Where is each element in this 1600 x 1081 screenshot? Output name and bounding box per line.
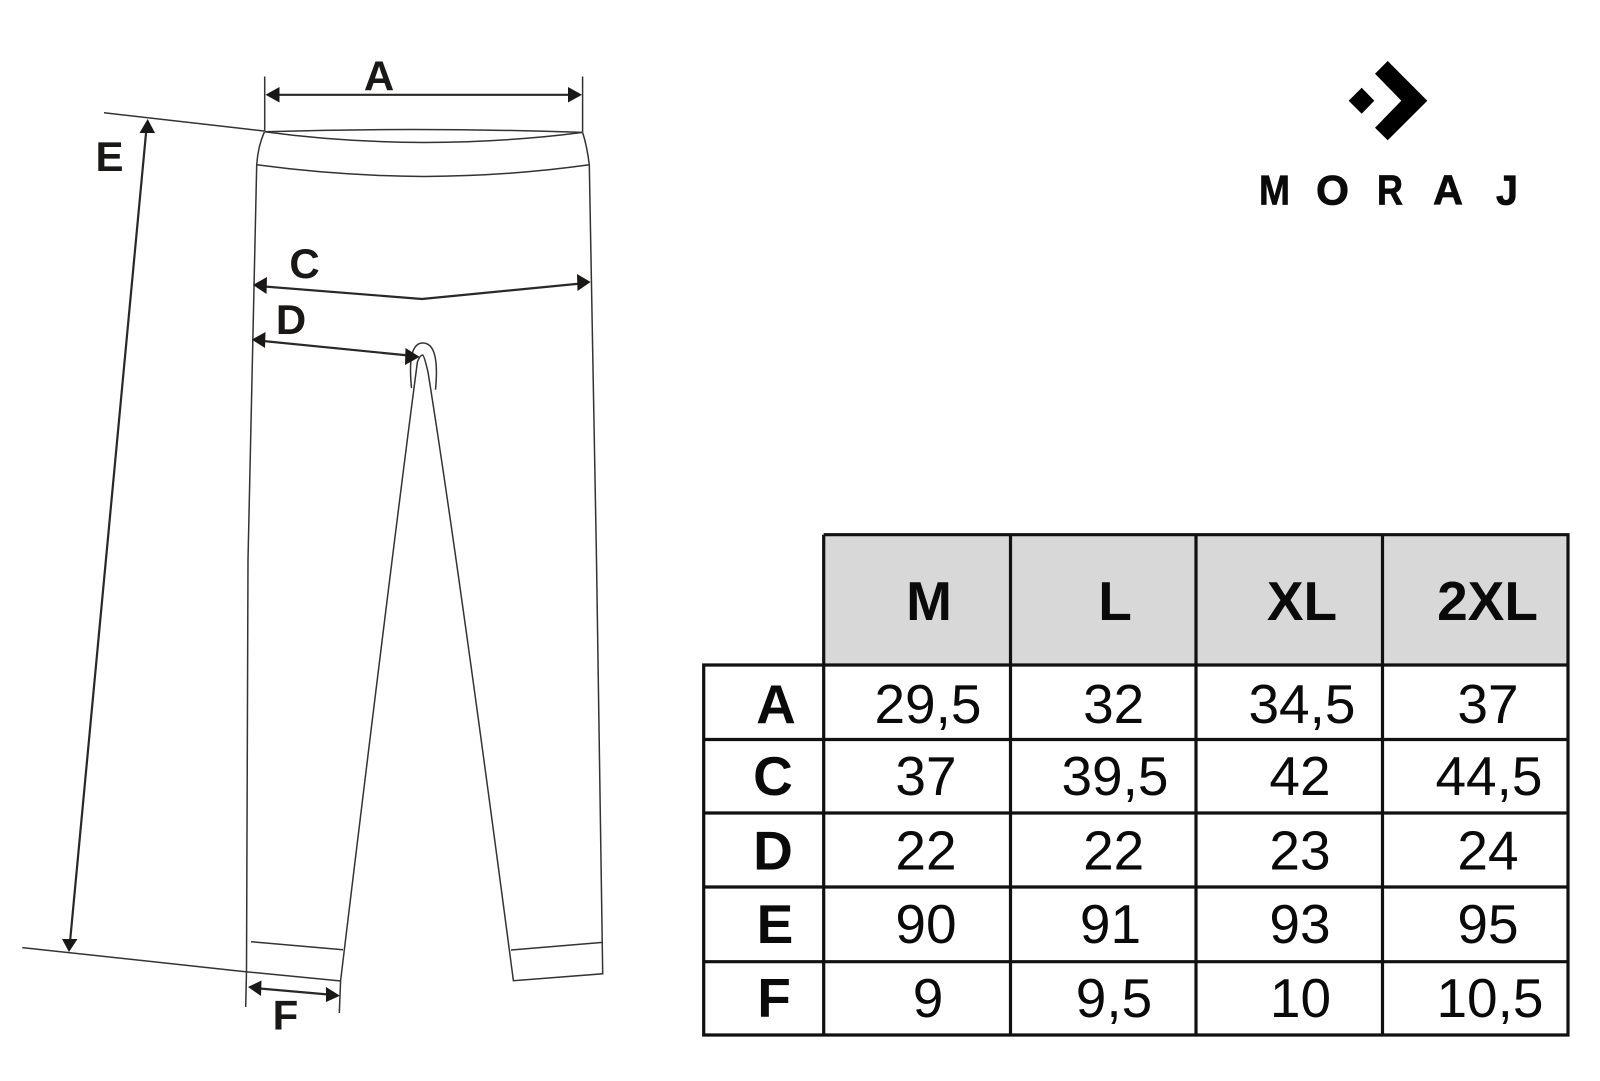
wordmark: A — [1433, 166, 1463, 214]
row F: 10 — [1270, 967, 1331, 1029]
dimension D: thigh width: D — [276, 296, 306, 343]
row F: 9 — [913, 967, 943, 1029]
dimension F: hem width — [246, 971, 341, 1038]
row D: 22 — [1083, 820, 1144, 882]
leggings diagram — [22, 52, 603, 1038]
wordmark — [1259, 166, 1518, 214]
row A: 29,5 — [874, 673, 982, 735]
wordmark: J — [1496, 166, 1518, 214]
row A: 34,5 — [1248, 673, 1356, 735]
wordmark: R — [1377, 166, 1403, 214]
row E — [757, 893, 1519, 955]
row E: 93 — [1269, 893, 1331, 955]
row E: E — [757, 893, 793, 955]
logo: MORAJ — [1259, 61, 1518, 214]
dimension C: hip width: C — [289, 240, 320, 287]
row A: A — [756, 673, 796, 735]
row F — [757, 967, 1544, 1029]
row D: 24 — [1457, 820, 1519, 882]
icon: chevron and diamond — [1349, 61, 1427, 140]
row C: 42 — [1269, 745, 1331, 807]
row E: 91 — [1080, 893, 1141, 955]
dimension F: hem width: F — [273, 992, 298, 1038]
dimension E: total length: E — [95, 133, 124, 180]
leggings outline — [246, 130, 603, 981]
row A: 37 — [1457, 673, 1519, 735]
row F: F — [757, 967, 791, 1029]
header row: sizes: XL — [1267, 570, 1337, 632]
header row: sizes: M — [906, 570, 952, 632]
row C: 39,5 — [1061, 745, 1169, 807]
row E: 90 — [895, 893, 957, 955]
row C: 37 — [895, 745, 957, 807]
row F: 10,5 — [1436, 967, 1544, 1029]
table header fills — [824, 535, 1568, 665]
row D: 22 — [895, 820, 957, 882]
table grid — [704, 535, 1568, 1035]
row A — [756, 673, 1519, 735]
header row: sizes — [906, 570, 1538, 632]
header row: sizes: L — [1098, 570, 1132, 632]
row D: D — [753, 820, 793, 882]
dimension A: waist width: A — [364, 52, 394, 100]
wordmark: M — [1259, 166, 1290, 214]
row C: 44,5 — [1435, 745, 1543, 807]
dimension C: hip width — [253, 240, 591, 299]
row D: 23 — [1269, 820, 1331, 882]
row A: 32 — [1083, 673, 1144, 735]
row E: 95 — [1457, 893, 1519, 955]
wordmark: O — [1316, 166, 1349, 214]
header row: sizes: 2XL — [1437, 570, 1538, 632]
row C: C — [753, 745, 793, 807]
row D — [753, 820, 1519, 882]
dimension E: total length — [22, 113, 341, 981]
dimension A: waist width — [265, 52, 583, 132]
size table — [704, 535, 1568, 1035]
row C — [753, 745, 1543, 807]
dimension D: thigh width — [252, 296, 420, 365]
row F: 9,5 — [1076, 967, 1152, 1029]
